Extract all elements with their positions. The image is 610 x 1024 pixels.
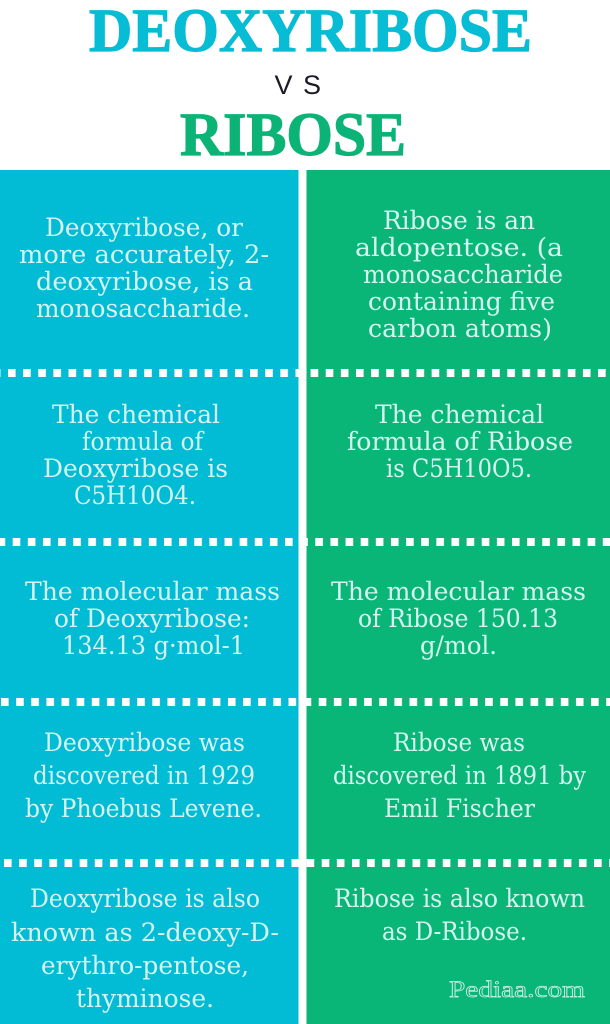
text: ribose formula: The chemical <box>375 400 544 429</box>
title: deoxyribose: DEOXYRIBOSE <box>89 0 532 65</box>
text: definition of deoxyribose: more accurately, 2- <box>19 240 269 269</box>
text: definition of deoxyribose <box>19 213 269 323</box>
text: deoxyribose other names <box>11 884 279 1013</box>
text: deoxyribose molecular mass: 134.13 g·mol-1 <box>62 631 245 660</box>
text: ribose other names <box>334 884 585 946</box>
text: definition of ribose: monosaccharide <box>363 260 563 289</box>
text: deoxyribose molecular mass: of Deoxyribose: <box>54 604 250 633</box>
logo: Pediaa.com: Pediaa.com <box>449 977 585 1002</box>
text: definition of ribose: containing five <box>368 287 555 316</box>
text: definition of deoxyribose: deoxyribose, is a <box>36 267 253 296</box>
text: deoxyribose formula: formula of <box>82 427 205 456</box>
text: ribose molecular mass: g/mol. <box>420 631 497 660</box>
text: deoxyribose molecular mass <box>25 577 280 660</box>
text: definition of deoxyribose: Deoxyribose, or <box>45 213 243 242</box>
title: vs: S <box>303 70 321 100</box>
text: definition of ribose: aldopentose. (a <box>355 233 563 262</box>
text: ribose other names: Ribose is also known <box>334 884 585 913</box>
text: ribose discovery: discovered in 1891 by <box>333 761 587 790</box>
text: ribose formula: is C5H10O5. <box>386 454 532 483</box>
text: deoxyribose other names: Deoxyribose is also <box>30 884 260 913</box>
text: deoxyribose discovery: by Phoebus Levene. <box>25 794 262 823</box>
text: ribose formula <box>347 400 573 483</box>
text: deoxyribose other names: thyminose. <box>76 984 214 1013</box>
text: definition of ribose: Ribose is an <box>383 206 535 235</box>
text: ribose formula: formula of Ribose <box>347 427 573 456</box>
text: ribose molecular mass <box>331 577 586 660</box>
panel: deoxyribose column <box>0 170 298 1024</box>
title: vs <box>274 70 321 100</box>
text: ribose discovery: Ribose was <box>393 728 525 757</box>
text: deoxyribose formula: C5H10O4. <box>74 481 196 510</box>
text: deoxyribose other names: erythro-pentose, <box>41 951 249 980</box>
title: ribose: RIBOSE <box>180 102 406 169</box>
panel: ribose column <box>306 170 610 1024</box>
text: ribose discovery: Emil Fischer <box>384 794 535 823</box>
text: ribose other names: as D-Ribose. <box>382 917 527 946</box>
text: ribose molecular mass: of Ribose 150.13 <box>358 604 558 633</box>
text: ribose molecular mass: The molecular mass <box>331 577 586 606</box>
text: deoxyribose formula: The chemical <box>52 400 220 429</box>
text: deoxyribose discovery <box>25 728 262 823</box>
text: deoxyribose formula <box>43 400 228 510</box>
title: vs: V <box>274 70 293 100</box>
text: deoxyribose discovery: discovered in 1929 <box>33 761 255 790</box>
text: ribose discovery <box>333 728 587 823</box>
text: definition of ribose: carbon atoms) <box>368 314 552 343</box>
text: definition of ribose <box>355 206 563 343</box>
text: deoxyribose formula: Deoxyribose is <box>43 454 228 483</box>
text: deoxyribose molecular mass: The molecular mass <box>25 577 280 606</box>
text: definition of deoxyribose: monosaccharide. <box>36 294 250 323</box>
text: deoxyribose discovery: Deoxyribose was <box>44 728 245 757</box>
text: deoxyribose other names: known as 2-deoxy-D- <box>11 918 279 947</box>
